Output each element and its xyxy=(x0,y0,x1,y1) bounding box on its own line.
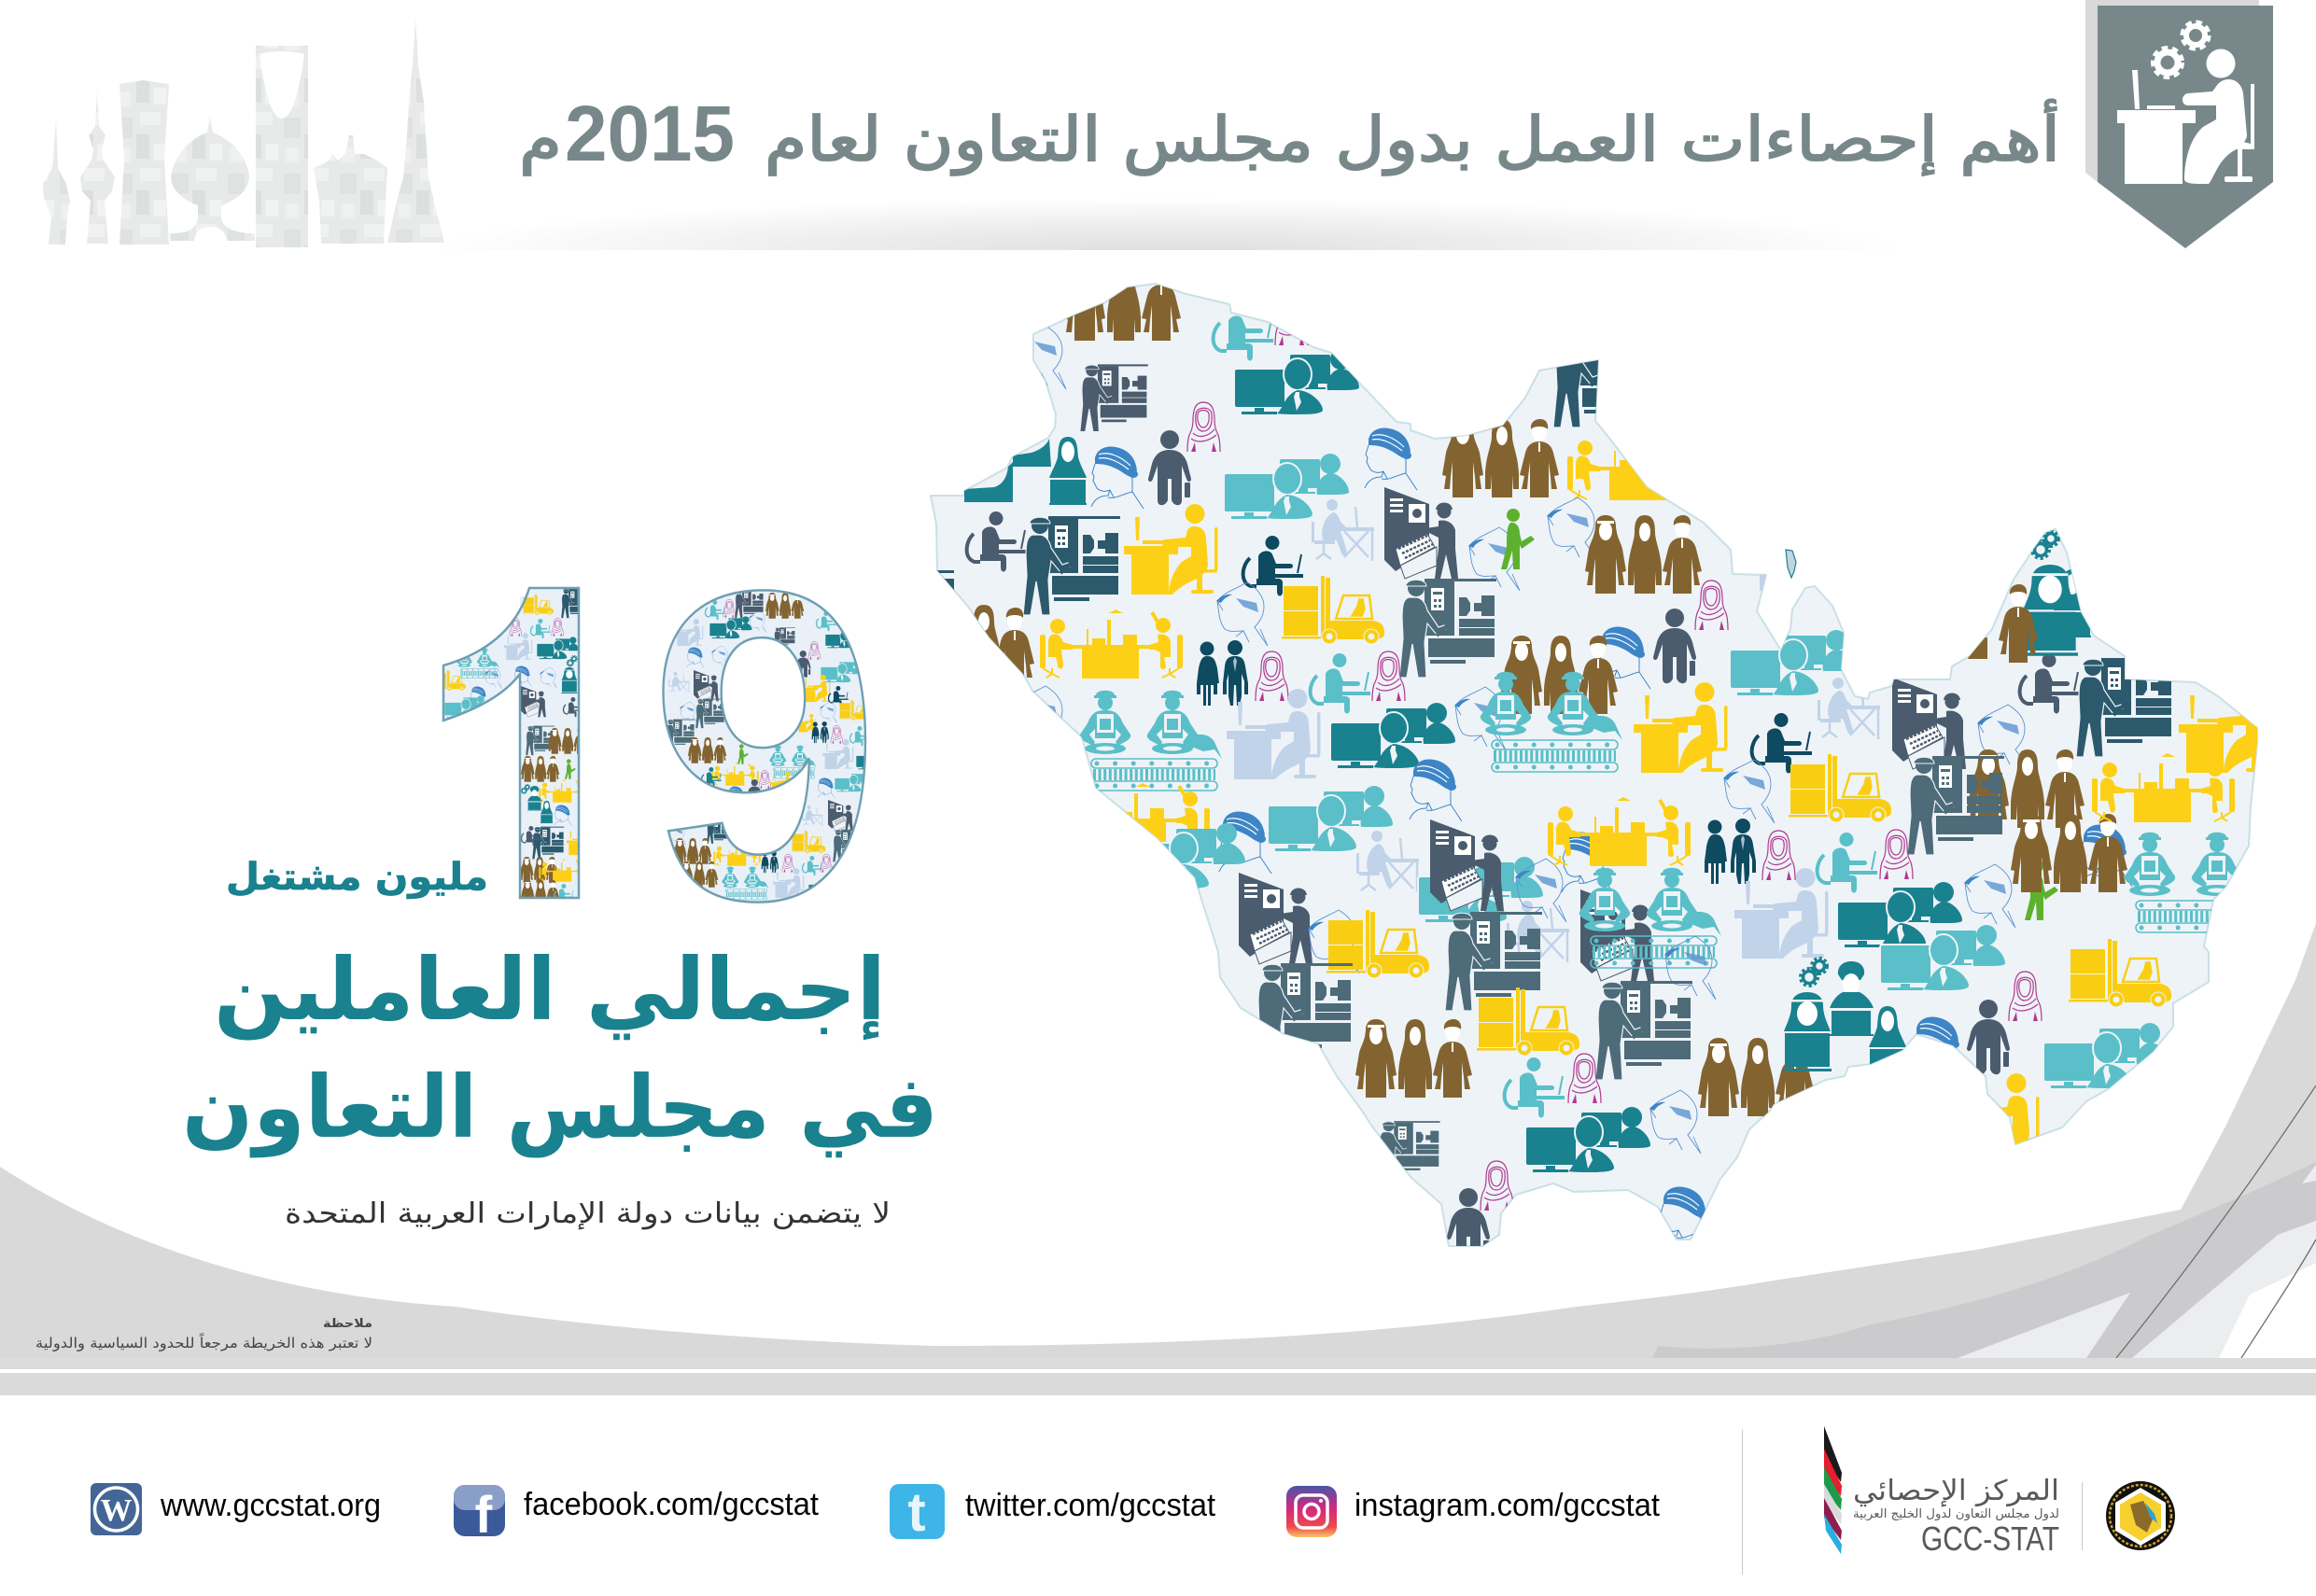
icon: sketched head xyxy=(1977,705,2028,768)
icon: hijab woman xyxy=(1256,651,1288,701)
icon: sketched head xyxy=(1547,497,1594,558)
icon: sketched head xyxy=(1015,686,1066,749)
social: facebook: f xyxy=(475,1485,493,1544)
icon: sketched head xyxy=(1454,687,1506,750)
icon: office computers xyxy=(2043,1023,2169,1088)
icon: office computers xyxy=(1330,703,1455,768)
icon: yellow team xyxy=(1567,441,1666,500)
icon: engineer head xyxy=(1219,812,1271,874)
social: facebook xyxy=(454,1485,820,1544)
icon: hijab woman xyxy=(1880,830,1913,879)
icon: yellow team xyxy=(1548,797,1691,866)
note: map disclaimer xyxy=(35,1317,372,1351)
icon: hijab woman xyxy=(1762,831,1795,880)
social: twitter xyxy=(890,1482,1216,1543)
icon: hijab woman xyxy=(1187,402,1220,452)
icon: seated laptop user xyxy=(2020,653,2080,713)
icon: hijab woman xyxy=(1274,327,1309,345)
icon: engineer head xyxy=(1913,1017,1965,1079)
icon: seated laptop user xyxy=(1311,653,1370,713)
icon: office computers xyxy=(1730,630,1855,695)
icon: machine operator xyxy=(1595,981,1692,1080)
icon: man with laptop xyxy=(1783,992,1832,1071)
icon: office computers xyxy=(1224,454,1349,519)
big number 19 filled with worker icons: 1 xyxy=(415,501,659,991)
icon: drafting worker xyxy=(1818,678,1880,739)
icon: forklift xyxy=(2069,939,2171,1007)
icon: gears xyxy=(1801,959,1827,986)
label: million workers: مليون مشتغل xyxy=(226,856,488,899)
heading: total workers in GCC: في مجلس التعاون xyxy=(182,1057,938,1158)
icon: control panel operator xyxy=(1239,873,1312,964)
icon: desk worker xyxy=(2179,682,2272,773)
icon: hijab woman xyxy=(1568,1054,1601,1103)
icon: robed workers xyxy=(1501,636,1618,714)
footnote: UAE exclusion: لا يتضمن بيانات دولة الإمارات العربية المتحدة xyxy=(285,1197,891,1230)
logo: GCC-STAT: GCC-STAT xyxy=(1921,1519,2059,1558)
logo: GCC-STAT: المركز الإحصائي xyxy=(1853,1475,2059,1507)
icon: machine operator xyxy=(1399,579,1496,678)
bottom swoosh decoration xyxy=(0,923,2316,1395)
icon: yellow team xyxy=(1040,609,1183,679)
social: website: W xyxy=(101,1493,133,1528)
icon: teal figure xyxy=(2054,569,2091,637)
icon: woman with laptop xyxy=(1049,437,1087,505)
icon: office computers xyxy=(1837,882,1962,947)
icon: control panel operator xyxy=(1580,889,1654,981)
icon: sketched head xyxy=(1515,859,1566,922)
logo: GCC seal xyxy=(2106,1481,2175,1550)
icon: machine operator xyxy=(1023,516,1120,615)
icon: control panel operator xyxy=(1430,819,1504,911)
icon: engineer head xyxy=(1598,627,1650,689)
icon: robed workers xyxy=(2011,814,2127,892)
social: twitter: twitter.com/gccstat xyxy=(965,1488,1216,1523)
logo: GCC-STAT xyxy=(1824,1426,2083,1558)
banner: worker icon ribbon xyxy=(2085,0,2273,248)
icon: sketched head xyxy=(1664,936,1716,1000)
icon: seated laptop user xyxy=(967,511,1027,571)
icon: engineer head xyxy=(2080,825,2132,887)
icon: assembly line xyxy=(2125,833,2267,932)
icon: sketched head xyxy=(1649,1090,1701,1154)
icon: standing man xyxy=(1148,430,1191,505)
icon: clipped machine xyxy=(936,570,954,590)
social: twitter: t xyxy=(907,1482,926,1543)
icon: hijab woman xyxy=(1695,581,1728,630)
icon: forklift xyxy=(1326,910,1429,978)
logo: GCC-STAT: لدول مجلس التعاون لدول الخليج العربية xyxy=(1853,1507,2059,1521)
icon: desk worker xyxy=(1634,682,1727,773)
map icon layer xyxy=(936,262,2272,1263)
icon: gears xyxy=(2032,531,2058,558)
icon: seated laptop user xyxy=(1752,713,1812,773)
social: instagram xyxy=(1286,1486,1661,1537)
icon: machine operator xyxy=(1907,756,2004,855)
icon: robed workers xyxy=(1968,749,2084,828)
icon: drafting worker xyxy=(1507,901,1569,962)
heading: total workers in GCC xyxy=(182,940,938,1158)
icon: desk worker xyxy=(1227,689,1320,779)
icon: robed workers xyxy=(1698,1038,1815,1116)
heading: total workers in GCC: إجمالي العاملين xyxy=(214,940,886,1041)
big number 19 filled with worker icons xyxy=(415,500,881,992)
icon: robed workers xyxy=(1585,515,1702,594)
icon: business couple xyxy=(1705,819,1756,884)
icon: yellow team xyxy=(2092,753,2235,822)
icon: forklift xyxy=(1789,754,1891,822)
icon: forklift xyxy=(1282,576,1384,644)
icon: engineer head xyxy=(1410,760,1462,821)
icon: robed workers xyxy=(1066,285,1181,341)
icon: robed man xyxy=(999,608,1034,678)
icon: machine operator xyxy=(1080,364,1148,431)
icon: control panel operator xyxy=(1892,678,1966,769)
header gradient band xyxy=(420,198,1914,250)
icon: operator top xyxy=(1553,360,1598,427)
icon: engineer head xyxy=(1562,833,1614,894)
icon: seated laptop user xyxy=(1243,536,1303,595)
icon: engineer head xyxy=(1365,427,1417,490)
social: website xyxy=(91,1483,381,1535)
social: instagram: instagram.com/gccstat xyxy=(1355,1488,1661,1523)
icon: sketched head xyxy=(1308,910,1359,973)
icon: machine operator xyxy=(2076,658,2173,757)
icon: sketched head xyxy=(1034,327,1066,390)
icon: drafting worker xyxy=(1312,499,1374,561)
icon: pale block xyxy=(1760,575,1766,591)
icon: hijab woman xyxy=(1372,651,1405,701)
icon: standing man xyxy=(1967,1000,2010,1074)
social: website: www.gccstat.org xyxy=(160,1488,381,1523)
icon: office computers xyxy=(1268,786,1393,851)
icon: standing man xyxy=(1653,609,1696,683)
icon: hijab woman xyxy=(1481,1161,1513,1211)
icon: seated laptop user xyxy=(1505,1057,1565,1118)
icon: desk worker xyxy=(1734,868,1828,959)
icon: office computers xyxy=(1525,1107,1650,1172)
map: GCC region filled with worker icons xyxy=(931,262,2272,1263)
icon: office computers xyxy=(1418,857,1543,922)
icon: assembly line xyxy=(1481,672,1622,772)
icon: robed workers xyxy=(1355,1019,1472,1098)
icon: man with laptop xyxy=(2022,565,2078,656)
icon: drafting worker xyxy=(1356,831,1419,892)
note: map disclaimer: لا تعتبر هذه الخريطة مرجعاً للحدود السياسية والدولية xyxy=(35,1333,372,1351)
icon: office computers xyxy=(1234,349,1359,414)
title: 2015 xyxy=(565,90,735,177)
icon: seated laptop user xyxy=(1212,315,1273,360)
icon: machine operator xyxy=(1378,1121,1440,1179)
icon: forklift xyxy=(1477,987,1579,1056)
icon: machine operator xyxy=(1256,963,1353,1062)
title: م xyxy=(519,104,562,175)
icon: office computers xyxy=(1880,925,2005,990)
title: أهم إحصاءات العمل بدول مجلس التعاون لعام xyxy=(765,99,2060,176)
icon: desk worker xyxy=(1124,504,1217,595)
icon: sketched head xyxy=(1468,527,1520,591)
icon: sketched head xyxy=(1216,582,1268,646)
icon: seated laptop user xyxy=(1818,833,1877,892)
icon: Bahrain island xyxy=(1786,550,1796,578)
icon: office computers xyxy=(1120,823,1245,889)
big number 19 filled with worker icons: 9 xyxy=(649,500,881,992)
icon: engineer head xyxy=(1091,446,1144,509)
icon: standing man xyxy=(1447,1188,1490,1263)
icon: business couple xyxy=(1197,640,1248,706)
icon: sketched head xyxy=(1723,760,1775,823)
icon: coastal teal blocks xyxy=(964,439,1051,502)
footer divider xyxy=(1742,1430,1743,1575)
icon: man in turban with laptop xyxy=(1830,961,1874,1036)
icon: yellow team xyxy=(1067,783,1210,852)
icon: sketched head xyxy=(1964,864,2015,928)
icon: hijab woman xyxy=(2009,972,2042,1021)
icon: green worker xyxy=(1501,509,1535,569)
skyline of Gulf landmarks xyxy=(43,19,444,247)
social: facebook: facebook.com/gccstat xyxy=(524,1487,820,1522)
icon: woman with laptop xyxy=(1869,1006,1906,1074)
note: map disclaimer: ملاحظة xyxy=(323,1317,372,1331)
icon: machine operator xyxy=(1445,912,1542,1011)
icon: engineer head xyxy=(1660,1187,1712,1249)
icon: robed woman xyxy=(975,605,1000,649)
icon: control panel operator xyxy=(1384,487,1458,579)
icon: robed workers xyxy=(1442,419,1559,497)
icon: green worker xyxy=(2025,860,2058,920)
icon: assembly line xyxy=(1579,868,1721,968)
icon: brown block xyxy=(1968,637,1987,659)
icon: assembly line xyxy=(1080,691,1222,791)
icon: desk worker xyxy=(1945,1073,2039,1164)
title xyxy=(519,90,2060,177)
icon: robed man xyxy=(1999,584,2038,663)
